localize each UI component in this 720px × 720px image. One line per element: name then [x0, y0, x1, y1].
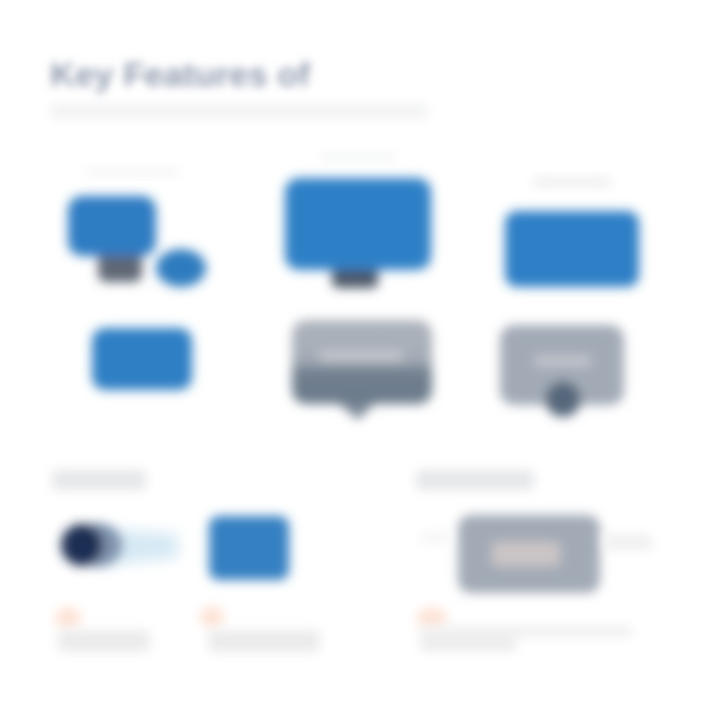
title: Key Features of — [50, 56, 311, 93]
label: large monitor — [320, 153, 395, 161]
icon: blue square — [209, 516, 289, 580]
icon: dark lens — [61, 523, 122, 567]
side smudge: device label left — [420, 532, 450, 544]
note marker: middle — [200, 606, 224, 628]
note marker: right — [417, 607, 447, 629]
subtitle — [50, 104, 428, 118]
side smudge: device label right — [604, 534, 652, 550]
icon: blue panel — [92, 328, 192, 390]
note marker: left — [55, 607, 81, 629]
icon: grey speech display — [500, 325, 624, 417]
icon: grey device — [458, 515, 600, 593]
section heading: right — [416, 470, 534, 490]
note text: right — [420, 626, 632, 651]
arrow: light beam — [100, 528, 178, 566]
label: wide monitor — [532, 177, 612, 187]
icon: grey display — [292, 320, 432, 420]
note text: middle — [208, 630, 320, 652]
label: small monitor — [85, 168, 180, 176]
icon: large monitor — [285, 178, 431, 288]
icon: wide monitor — [505, 211, 639, 287]
section heading: left — [52, 470, 146, 490]
note text: left — [58, 630, 150, 652]
icon: monitor and small device — [68, 196, 206, 287]
